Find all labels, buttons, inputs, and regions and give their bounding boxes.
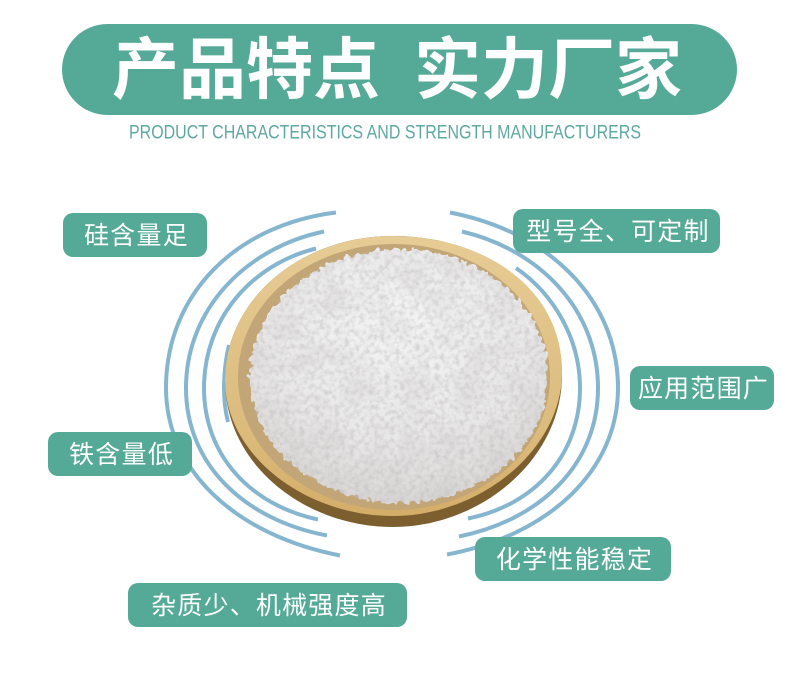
- label: wide applications: 应用范围广: [638, 375, 769, 403]
- bowl rim: [225, 236, 562, 516]
- title banner: [62, 24, 737, 115]
- bowl inner shade: [238, 244, 550, 510]
- label: full range of models: 型号全、可定制: [526, 218, 710, 246]
- label: low iron: 铁含量低: [69, 441, 174, 469]
- label: low impurity, high strength: 杂质少、机械强度高: [151, 592, 387, 620]
- grain texture: [250, 250, 548, 502]
- silica grains: [250, 249, 548, 503]
- title: 实力厂家: [414, 33, 682, 108]
- arcs: left signal lines: [166, 212, 340, 556]
- label: full range of models: [513, 209, 720, 253]
- label: low impurity, high strength: [128, 583, 407, 627]
- wooden bowl with salt: [225, 236, 562, 527]
- bowl underside: [225, 236, 562, 527]
- arcs: right signal lines: [447, 212, 618, 554]
- title: 产品特点: [112, 33, 380, 108]
- label: silicon content: 硅含量足: [84, 222, 189, 250]
- label: low iron: [48, 432, 192, 476]
- label: wide applications: [630, 366, 774, 410]
- title: [112, 33, 682, 108]
- central graphic: arcs and bowl: [164, 210, 620, 558]
- grey shading: [250, 250, 548, 502]
- label: silicon content: [63, 213, 207, 257]
- label: chemical stability: 化学性能稳定: [496, 546, 653, 574]
- label: chemical stability: [475, 537, 671, 581]
